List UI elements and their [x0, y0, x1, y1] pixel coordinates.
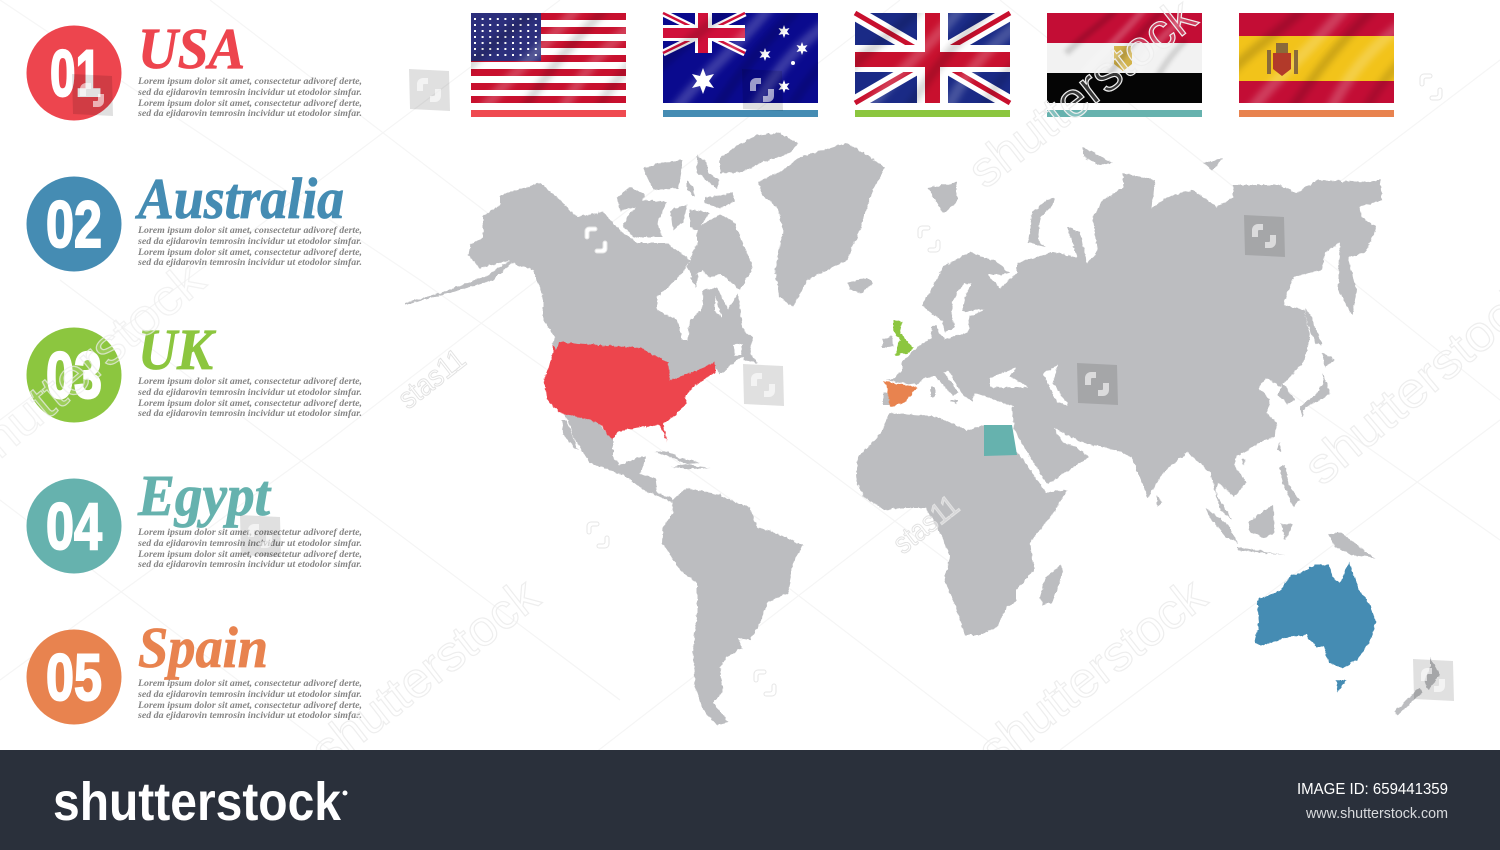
- Eurasia: [885, 173, 1382, 520]
- Africa: [856, 413, 1067, 635]
- Mediterranean islands: [931, 387, 958, 404]
- Spain colour bar: [1239, 110, 1394, 117]
- item 01 USA: sed da ejidarovin temrosin incividur ut etodolor simfar.: [137, 87, 362, 98]
- Portugal: [883, 392, 890, 405]
- item 02 Australia: 02: [46, 187, 102, 261]
- item 03 UK: [26, 317, 362, 422]
- watermark square icons: [72, 69, 1454, 701]
- item 02 Australia: Australia: [135, 166, 344, 231]
- item 01 USA: Lorem ipsum dolor sit amet, consectetur adivoref derte,: [137, 76, 362, 87]
- item 05 Spain: Spain: [138, 615, 268, 680]
- item 05 Spain: sed da ejidarovin temrosin incividur ut etodolor simfar.: [137, 710, 362, 721]
- item 04 Egypt: sed da ejidarovin temrosin incividur ut etodolor simfar.: [137, 559, 362, 570]
- watermark outline icons: [585, 74, 1442, 696]
- Greenland: [758, 143, 885, 307]
- flag: Spain: [1229, 3, 1409, 117]
- Egypt highlight: [984, 425, 1017, 456]
- item 03 UK: sed da ejidarovin temrosin incividur ut etodolor simfar.: [137, 408, 362, 419]
- Arctic islands of Eurasia: [928, 147, 1223, 247]
- Iceland: [848, 278, 873, 293]
- Madagascar: [1040, 565, 1063, 605]
- USA colour bar: [471, 110, 626, 117]
- item 03 UK: UK: [138, 317, 216, 382]
- item 05 Spain: sed da ejidarovin temrosin incividur ut etodolor simfar.: [137, 689, 362, 700]
- Southeast Asia islands: [1157, 442, 1375, 558]
- item 05 Spain: Lorem ipsum dolor sit amet, consectetur adivoref derte,: [137, 678, 362, 689]
- item 04 Egypt: Egypt: [137, 463, 272, 528]
- item 03 UK: Lorem ipsum dolor sit amet, consectetur adivoref derte,: [137, 398, 362, 409]
- image id: IMAGE ID: 659441359: [1297, 781, 1448, 798]
- item 05 Spain: [26, 615, 362, 724]
- Egypt colour bar: [1047, 110, 1202, 117]
- flags row: [461, 3, 1409, 117]
- Australia highlight: [1255, 562, 1376, 692]
- item 04 Egypt: [26, 463, 362, 574]
- USA highlight: [544, 342, 715, 442]
- item 01 USA: 01: [50, 36, 101, 110]
- item 04 Egypt: 04: [46, 489, 102, 563]
- white seas: [715, 283, 1068, 445]
- South America: [662, 488, 803, 725]
- Japan: [1300, 353, 1335, 417]
- item 04 Egypt: Lorem ipsum dolor sit amet, consectetur adivoref derte,: [137, 549, 362, 560]
- Newfoundland: [743, 350, 758, 363]
- flag: Australia: [653, 3, 833, 117]
- item 02 Australia: Lorem ipsum dolor sit amet, consectetur adivoref derte,: [137, 225, 362, 236]
- watermark text: stas11: [887, 489, 966, 561]
- item 02 Australia: [26, 166, 362, 272]
- item 05 Spain: 05: [46, 640, 102, 714]
- Spain highlight: [883, 381, 917, 407]
- registered mark: [342, 790, 348, 796]
- New Zealand: [1394, 657, 1440, 715]
- item 01 USA: USA: [138, 16, 245, 81]
- Canadian Arctic islands: [617, 133, 798, 290]
- Mexico and Central America: [560, 410, 672, 503]
- world map: [405, 133, 1440, 725]
- Caribbean islands: [655, 451, 710, 469]
- item 01 USA: Lorem ipsum dolor sit amet, consectetur adivoref derte,: [137, 98, 362, 109]
- Baja California: [562, 420, 578, 450]
- watermark text: shutterstock: [300, 566, 550, 779]
- item 03 UK: Lorem ipsum dolor sit amet, consectetur adivoref derte,: [137, 376, 362, 387]
- Ireland: [882, 335, 893, 348]
- flag: UK: [845, 3, 1025, 117]
- item 04 Egypt: Lorem ipsum dolor sit amet, consectetur adivoref derte,: [137, 527, 362, 538]
- footer bar: [0, 750, 1500, 850]
- item 05 Spain: Lorem ipsum dolor sit amet, consectetur adivoref derte,: [137, 700, 362, 711]
- watermark text: shutterstock: [967, 566, 1217, 779]
- highlighted countries: [544, 320, 1376, 692]
- Australia colour bar: [663, 110, 818, 117]
- Korea: [1278, 383, 1295, 404]
- watermark text: stas11: [392, 343, 472, 416]
- UK highlight: [893, 320, 913, 355]
- item 03 UK: 03: [46, 338, 102, 412]
- item 03 UK: sed da ejidarovin temrosin incividur ut etodolor simfar.: [137, 387, 362, 398]
- UK colour bar: [855, 110, 1010, 117]
- item 02 Australia: Lorem ipsum dolor sit amet, consectetur adivoref derte,: [137, 247, 362, 258]
- flag: Egypt: [1047, 6, 1202, 117]
- item 02 Australia: sed da ejidarovin temrosin incividur ut etodolor simfar.: [137, 236, 362, 247]
- Sakhalin: [1305, 308, 1322, 345]
- item 02 Australia: sed da ejidarovin temrosin incividur ut etodolor simfar.: [137, 257, 362, 268]
- flag: USA: [461, 3, 641, 117]
- item 01 USA: sed da ejidarovin temrosin incividur ut etodolor simfar.: [137, 108, 362, 119]
- footer logo: shutterstock: [53, 772, 342, 832]
- website: www.shutterstock.com: [1305, 806, 1448, 822]
- item 04 Egypt: sed da ejidarovin temrosin incividur ut etodolor simfar.: [137, 538, 362, 549]
- item 01 USA: [26, 16, 362, 120]
- North America: [405, 183, 753, 415]
- legend list: [26, 16, 362, 724]
